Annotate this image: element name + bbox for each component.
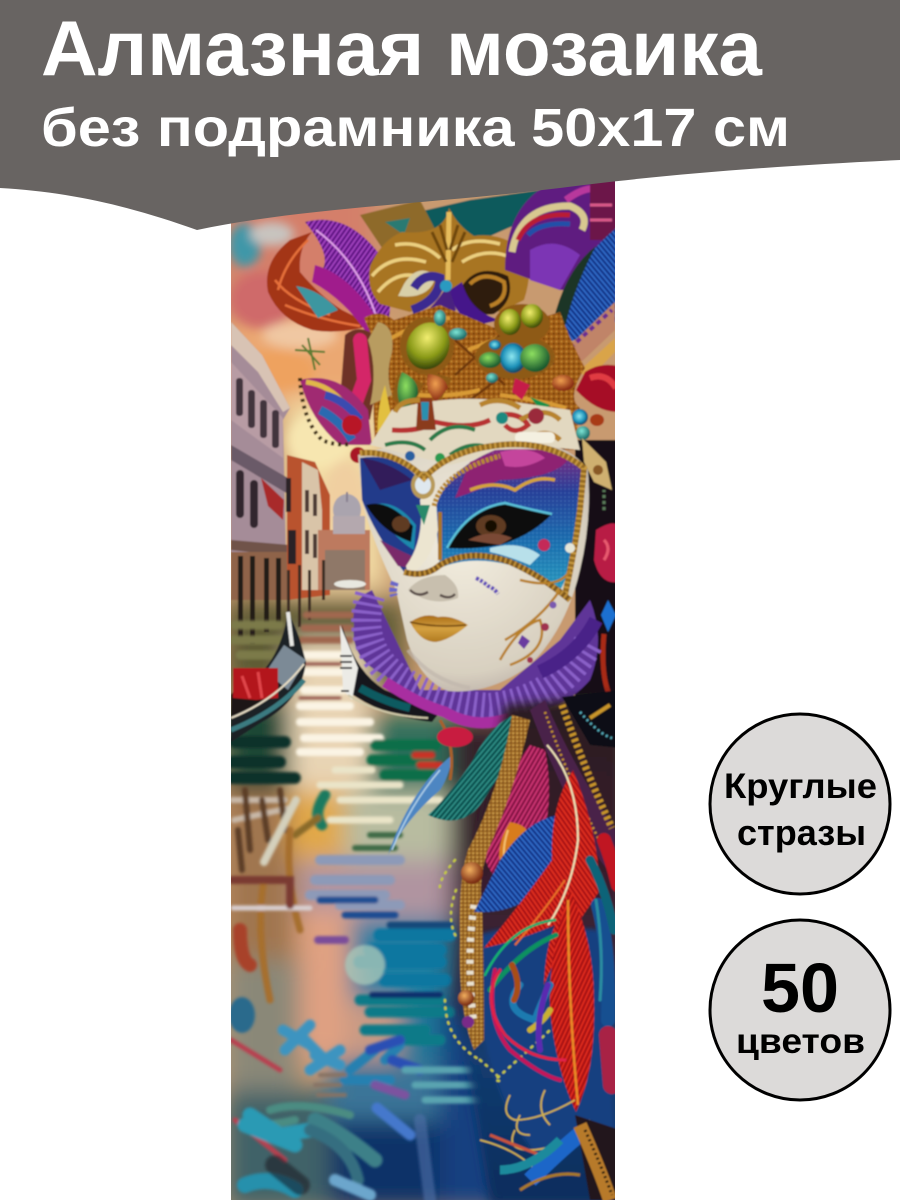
main red plume upper fan [484,770,600,985]
gold rope edging [360,444,584,665]
feathered plumes top left [267,220,390,340]
badge: 50 colours: 50 [761,949,839,1027]
mask face [358,398,589,691]
right plumes and scrolled ornament [505,176,620,412]
badge: 50 colours: цветов [736,1022,865,1061]
main red plume lower [550,890,594,1112]
canal reflections [232,615,440,848]
headdress gold body with gems [364,304,604,450]
left eye panel [360,457,422,572]
gold beaded band [460,715,530,1050]
left palazzo building [231,322,291,644]
eye openings [447,503,552,549]
upper jewelled band [530,700,615,880]
right eye panel [435,449,584,590]
subtitle: без подрамника 50х17 см [41,98,790,158]
product artwork: Venetian mask mosaic [225,170,621,1200]
gold lips [410,615,468,642]
purple ruff collar [353,590,598,723]
large gems [378,304,604,443]
nose bridge [406,495,438,575]
right side drapery [574,438,615,697]
Venice clouds [229,222,367,540]
gondola in the centre [340,625,440,722]
blue plume [474,815,565,912]
dark undercoat [455,695,620,1200]
top gold crest [360,190,540,324]
badge: 50 colours [710,920,890,1100]
header banner [0,0,900,230]
blue backing behind feathers [482,925,615,1152]
teal feather [428,716,520,821]
nose [408,575,458,602]
water brush strokes [229,790,490,1200]
badge: round rhinestones: Круглые [724,767,877,806]
sky and water colour base [225,170,620,1200]
left ornaments and bead string [295,329,378,463]
central jewel [411,471,435,525]
cascading feathers on the lower right [388,690,620,1200]
red brick buildings and dome [286,455,370,636]
gold gem settings [392,304,555,414]
bottom curls [480,1090,620,1200]
magenta and orange plume [483,745,549,885]
thin blue feather [388,755,452,855]
badge: round rhinestones: стразы [737,812,866,853]
title: Алмазная мозаика [41,4,763,92]
forehead band ornaments [370,398,580,465]
side feathers [485,840,618,1085]
badge: round rhinestones [710,714,890,894]
cheek jewels [393,539,575,663]
gondola on the left [231,612,306,742]
